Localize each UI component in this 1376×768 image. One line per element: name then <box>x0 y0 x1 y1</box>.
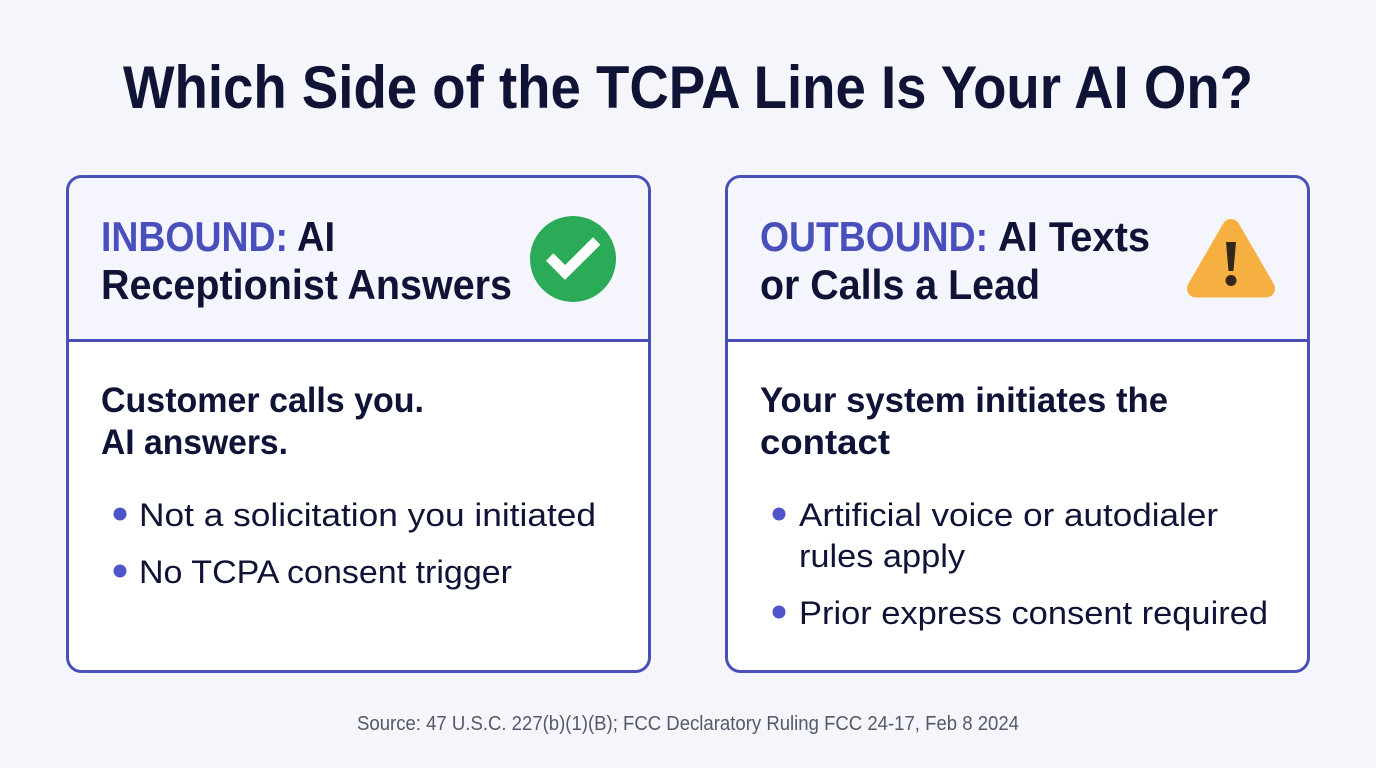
inbound subheading: AI answers. <box>101 423 288 462</box>
inbound heading <box>101 213 512 308</box>
outbound heading <box>760 213 1150 308</box>
outbound header band <box>728 178 1307 340</box>
outbound heading: AI Texts <box>998 213 1150 260</box>
outbound subheading: contact <box>760 423 890 462</box>
icon: green check <box>530 216 616 302</box>
panel: inbound <box>68 176 650 672</box>
inbound header band <box>69 178 648 340</box>
title: Which Side of the TCPA Line Is Your AI On? <box>123 54 1253 121</box>
inbound heading: INBOUND: <box>101 213 288 260</box>
inbound header divider <box>68 339 649 342</box>
inbound bullet 2: No TCPA consent trigger <box>139 554 512 590</box>
outbound subheading: Your system initiates the <box>760 381 1168 420</box>
outbound heading: OUTBOUND: <box>760 213 988 260</box>
source note: Source: 47 U.S.C. 227(b)(1)(B); FCC Declaratory Ruling FCC 24-17, Feb 8 2024 <box>357 713 1019 735</box>
inbound bullet 1: Not a solicitation you initiated <box>139 497 596 533</box>
outbound bullet 1: Artificial voice or autodialer <box>799 497 1218 533</box>
outbound card body <box>726 176 1308 672</box>
outbound bullet 1 <box>772 497 1218 574</box>
outbound subheading <box>760 381 1168 462</box>
outbound bullet 1: rules apply <box>799 538 966 574</box>
icon: warning triangle <box>1196 228 1266 288</box>
inbound heading: AI <box>297 213 335 260</box>
outbound heading: or Calls a Lead <box>760 261 1040 308</box>
inbound subheading: Customer calls you. <box>101 381 424 420</box>
outbound bullet 2: Prior express consent required <box>799 595 1268 631</box>
inbound subheading <box>101 381 424 462</box>
inbound heading: Receptionist Answers <box>101 261 512 308</box>
inbound card body <box>68 176 650 672</box>
panel: outbound <box>726 176 1308 672</box>
outbound header divider <box>727 339 1308 342</box>
